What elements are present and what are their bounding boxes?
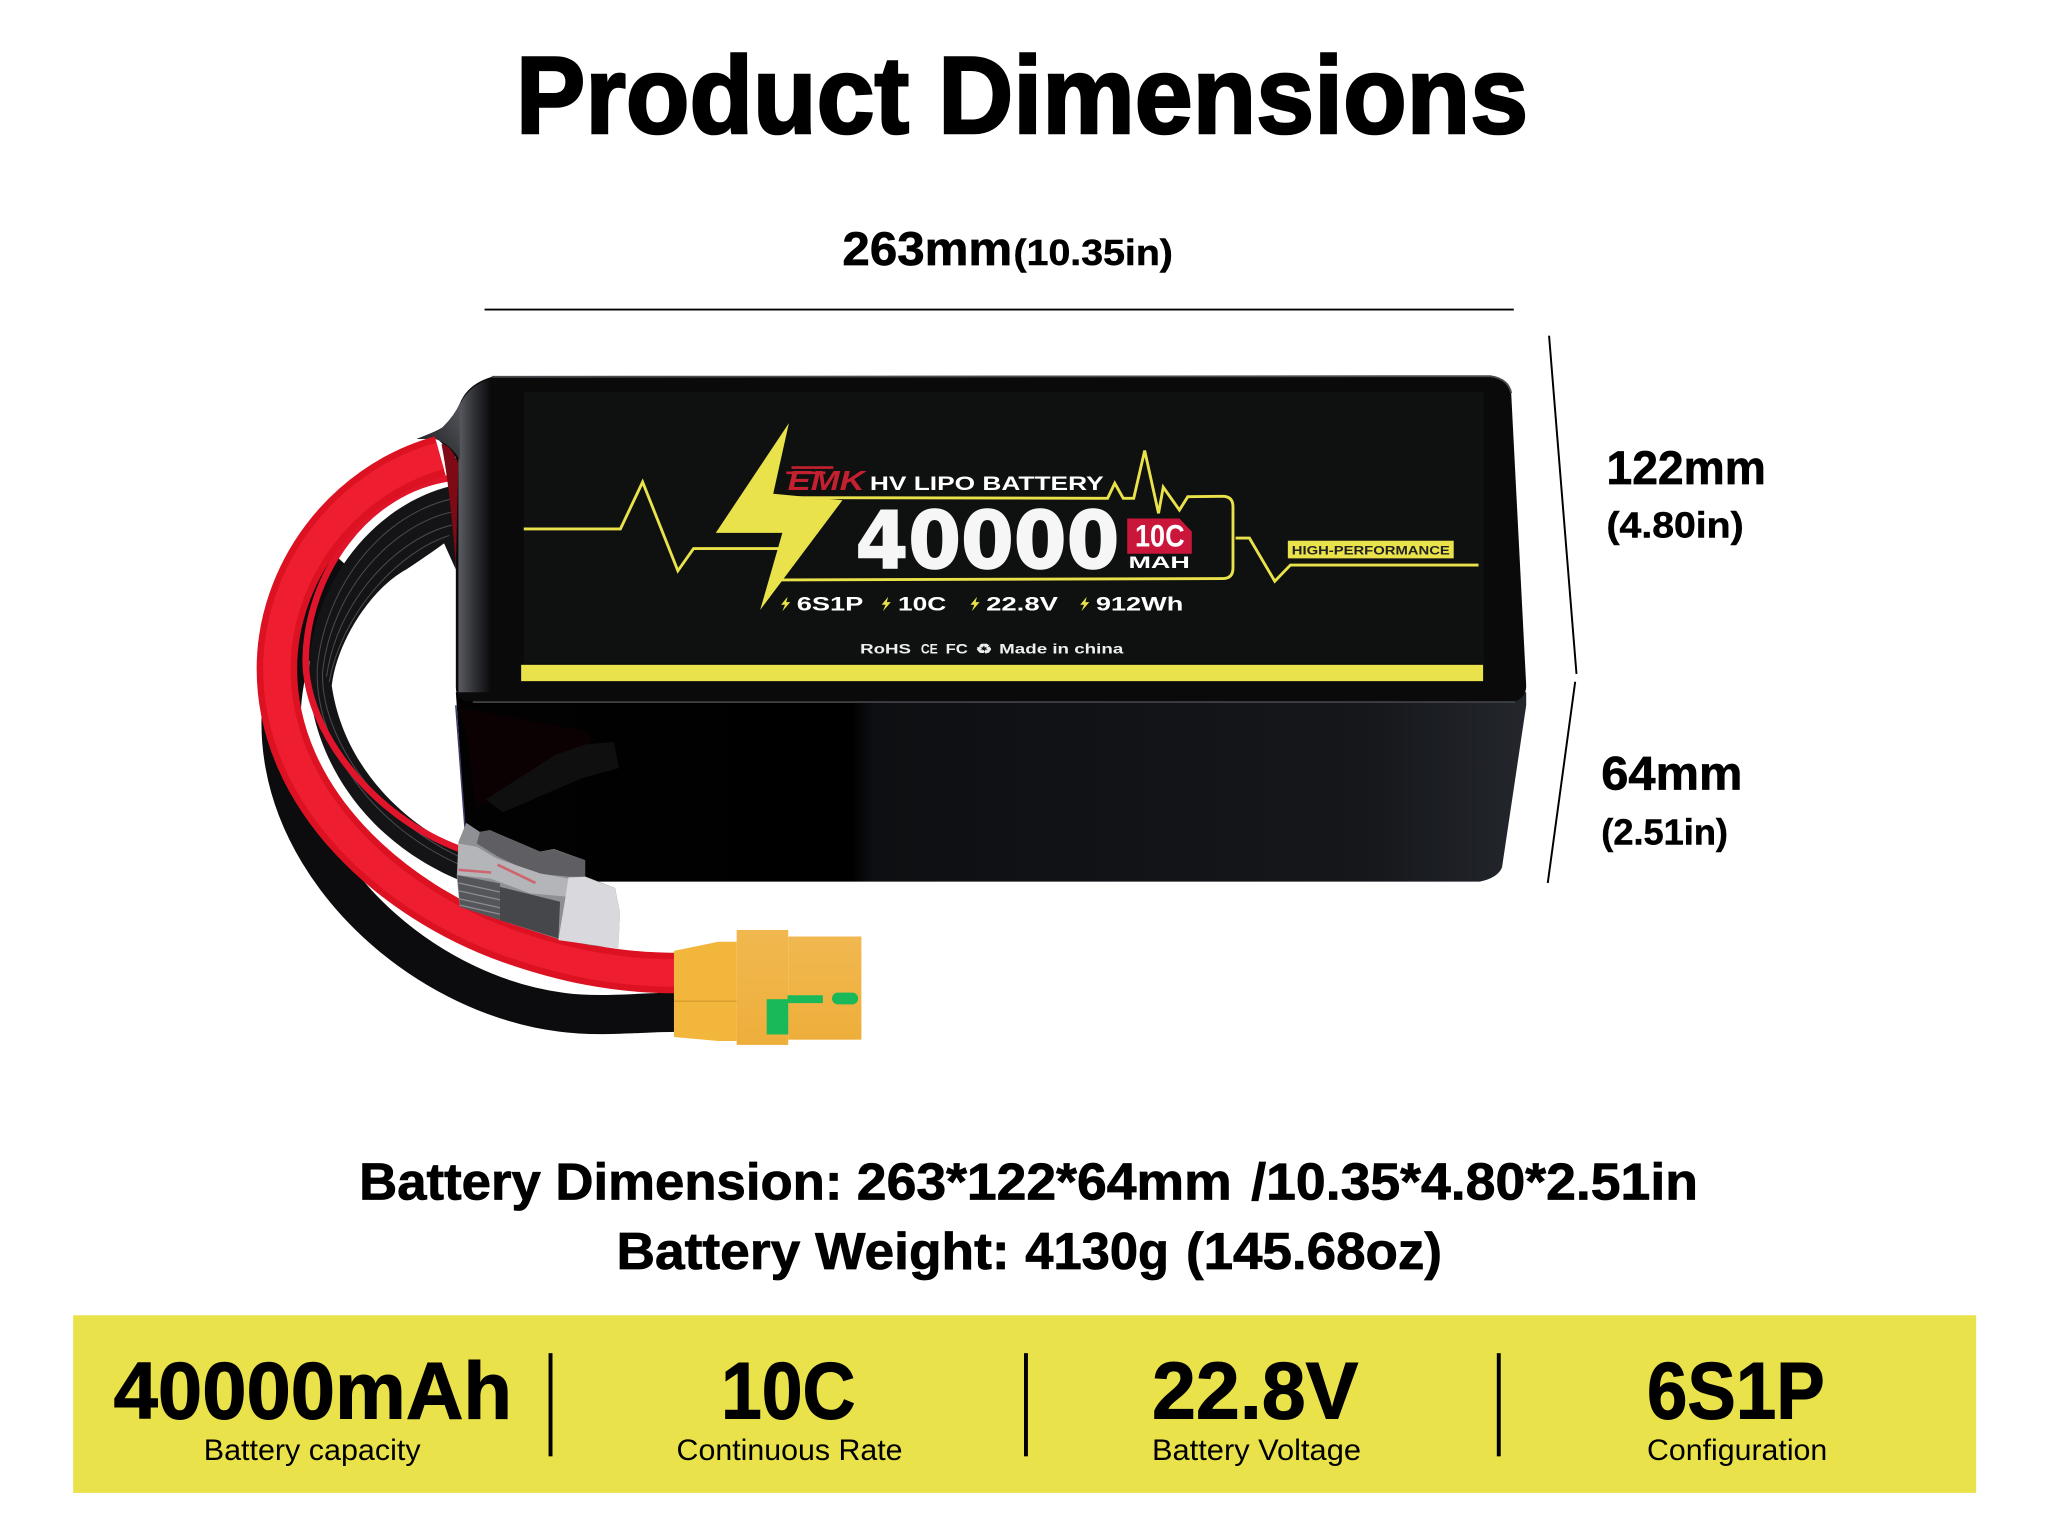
- XT90 connector: [674, 930, 861, 1045]
- stat: capacity: Battery capacity: [204, 1434, 421, 1467]
- label: yellow base stripe: [521, 665, 1483, 681]
- label: spec row: 912Wh: [1096, 595, 1183, 616]
- cable: black power wire: [281, 562, 677, 1015]
- stat: rate: Continuous Rate: [677, 1434, 903, 1467]
- stat: configuration: 6S1P: [1647, 1346, 1825, 1436]
- width dimension label: (10.35in): [1014, 232, 1173, 273]
- summary text: Battery Dimension:: [359, 1154, 842, 1212]
- stat: configuration: Configuration: [1647, 1434, 1827, 1467]
- title: Product Dimensions: [516, 35, 1528, 157]
- width dimension label: 263mm: [842, 222, 1012, 275]
- stat: rate: [677, 1346, 903, 1467]
- cable: balance ribbon: [306, 478, 460, 880]
- label: spec row: [781, 595, 1183, 616]
- stat: capacity: 40000mAh: [114, 1346, 512, 1436]
- spec band: [73, 1315, 1976, 1493]
- label: high performance tag: [1288, 541, 1454, 558]
- height dimension label: [1548, 682, 1742, 883]
- label: capacity number: 40000: [856, 494, 1119, 587]
- label: certifications: RoHS: [860, 642, 911, 657]
- height dimension label: (2.51in): [1601, 811, 1728, 852]
- stat: voltage: Battery Voltage: [1152, 1434, 1361, 1467]
- label: certifications: ♻: [976, 642, 993, 657]
- label: product name: HV LIPO BATTERY: [870, 473, 1104, 495]
- summary text: Battery Weight:: [616, 1223, 1010, 1281]
- stat: rate: 10C: [721, 1346, 856, 1436]
- label: spec row: 6S1P: [797, 595, 863, 616]
- depth dimension label: [1549, 336, 1766, 674]
- label: certifications: [860, 642, 1124, 657]
- summary text: [359, 1154, 1698, 1281]
- summary text: (145.68oz): [1186, 1223, 1442, 1281]
- label: 10C badge: MAH: [1128, 554, 1190, 572]
- battery top face: [417, 376, 1526, 702]
- width dimension label: [485, 222, 1514, 310]
- label: pulse lines: [524, 451, 1479, 581]
- label: certifications: Made in china: [999, 642, 1124, 657]
- stat: configuration: [1647, 1346, 1827, 1467]
- cable: red power wire: [277, 456, 677, 973]
- label: 10C badge: [1127, 519, 1192, 572]
- depth dimension label: (4.80in): [1607, 504, 1744, 545]
- label: spec row: 22.8V: [986, 595, 1059, 616]
- battery front face: [456, 692, 1526, 882]
- green anti-spark marks: [767, 993, 858, 1034]
- label: certifications: FC: [946, 642, 968, 657]
- label: certifications: CE: [921, 642, 938, 657]
- summary text: 4130g: [1025, 1223, 1169, 1281]
- battery product illustration: [277, 376, 1526, 1045]
- summary text: /10.35*4.80*2.51in: [1251, 1154, 1698, 1212]
- label: brand logo: EMK: [788, 465, 867, 496]
- height dimension label: 64mm: [1601, 747, 1742, 800]
- label: 10C badge: 10C: [1135, 519, 1185, 554]
- label: spec row: 10C: [898, 595, 947, 616]
- stat: voltage: 22.8V: [1152, 1346, 1358, 1436]
- label: lightning bolt: [716, 423, 842, 610]
- summary text: 263*122*64mm: [857, 1154, 1232, 1212]
- depth dimension label: 122mm: [1607, 441, 1766, 494]
- balance connector: [457, 823, 620, 949]
- label: high performance tag: HIGH-PERFORMANCE: [1292, 543, 1450, 557]
